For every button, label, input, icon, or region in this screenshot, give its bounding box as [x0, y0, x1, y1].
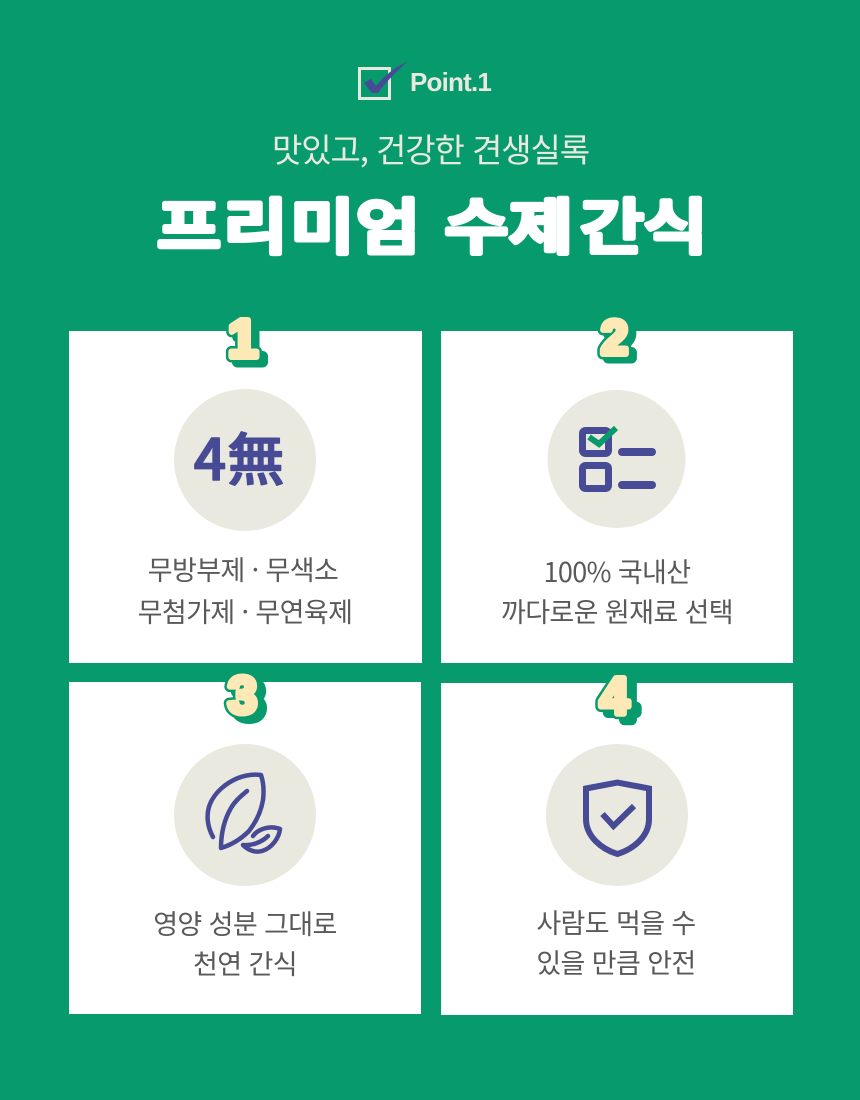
caption 4 — [536, 902, 696, 981]
panel: card 4 — [441, 668, 793, 1015]
number 3: 3 — [235, 672, 263, 730]
number 3: 3 — [228, 667, 257, 725]
number 4: 4 — [608, 674, 637, 732]
subtitle: 맛있고, 건강한 견생실록 — [272, 124, 589, 172]
caption 3: 영양 성분 그대로 — [153, 903, 337, 942]
caption 3 — [153, 903, 337, 982]
caption 4: 있을 만큼 안전 — [536, 942, 696, 981]
number 4: 4 — [600, 668, 629, 726]
title: 프리미엄 수제간식 — [157, 179, 707, 266]
icon: checklist — [548, 390, 686, 528]
icon: 4 no additives: 4無 — [194, 415, 285, 497]
caption 1 — [138, 549, 352, 630]
number 2: 2 — [601, 312, 628, 365]
icon: header check mark — [360, 62, 407, 98]
number 1: 1 — [234, 314, 264, 374]
caption 1: 무방부제 · 무색소 — [148, 549, 338, 588]
point label: Point.1 — [410, 67, 491, 97]
number 1: 1 — [228, 309, 258, 369]
panel: card 2 — [441, 312, 793, 663]
number 4: 4 — [600, 668, 629, 726]
icon: 4 no additives — [174, 389, 316, 531]
icon: leaves — [174, 744, 316, 886]
number 3: 3 — [228, 667, 257, 725]
caption 1: 무첨가제 · 무연육제 — [138, 591, 352, 630]
caption 2: 100% 국내산 — [543, 551, 691, 590]
number 2: 2 — [607, 316, 633, 369]
panel: card 1 — [69, 309, 422, 663]
caption 4: 사람도 먹을 수 — [536, 902, 696, 941]
number 1: 1 — [228, 309, 258, 369]
caption 3: 천연 간식 — [193, 943, 297, 982]
number 2: 2 — [601, 312, 628, 365]
panel: card 3 — [69, 667, 421, 1014]
icon: shield — [546, 744, 688, 886]
caption 2 — [501, 551, 733, 630]
caption 2: 까다로운 원재료 선택 — [501, 591, 733, 630]
